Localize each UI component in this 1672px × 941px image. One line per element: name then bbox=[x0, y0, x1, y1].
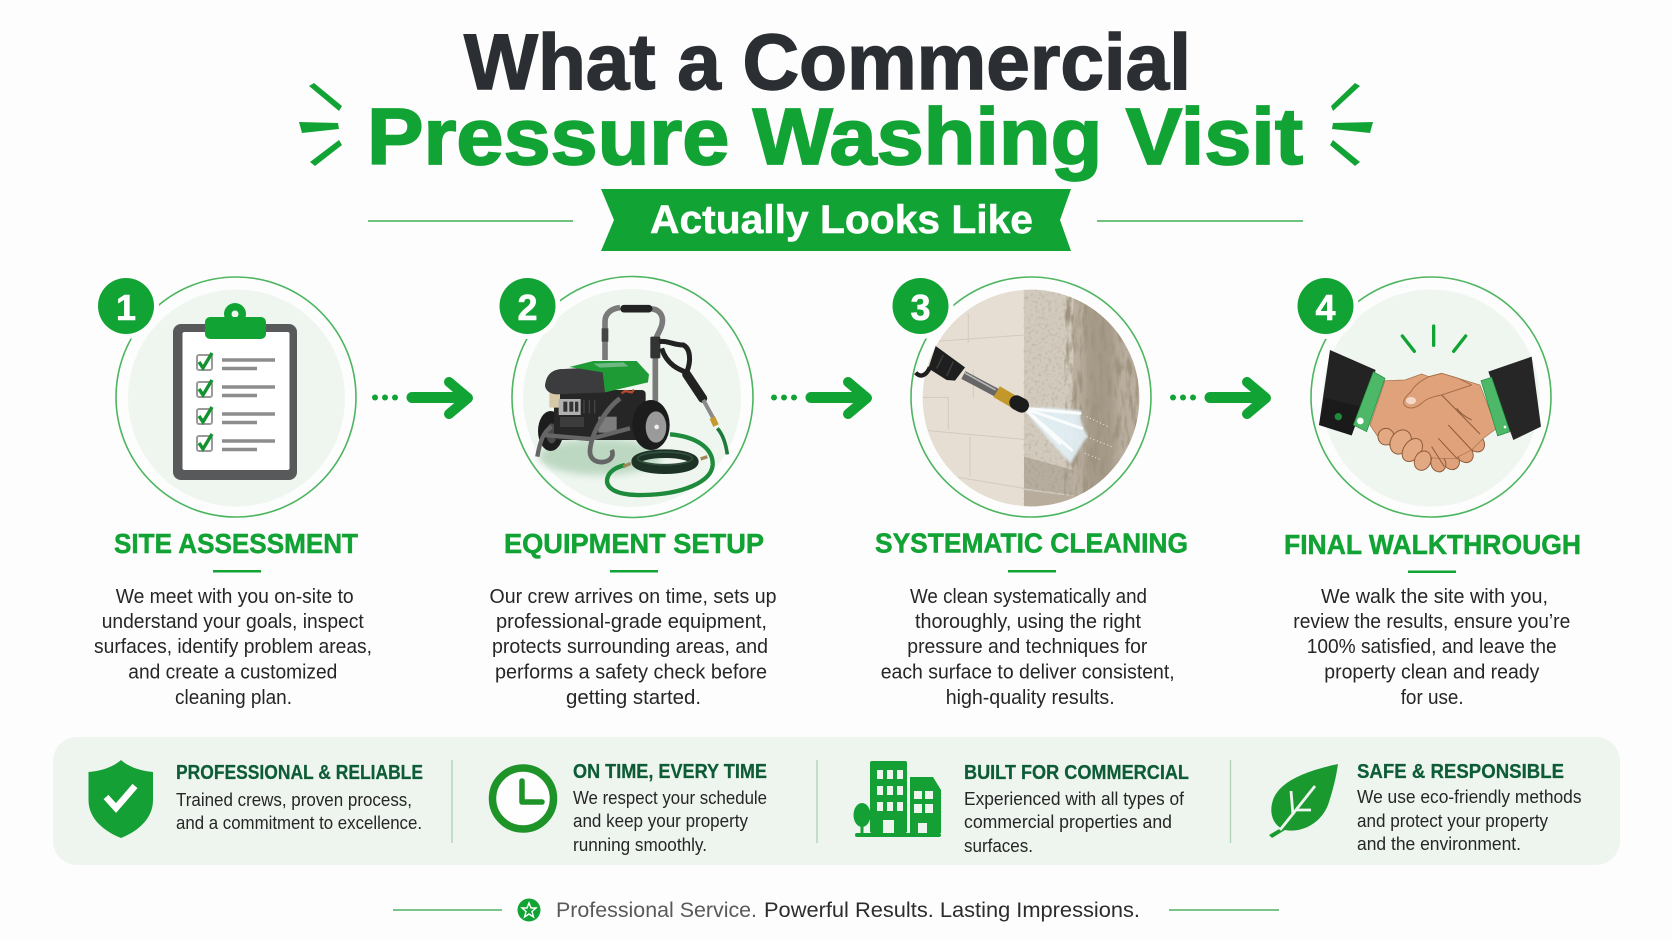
icon: pressure washer bbox=[537, 308, 727, 495]
footer tagline: Professional Service. bbox=[556, 899, 757, 922]
badge 2: 2 bbox=[517, 287, 538, 328]
text: site assessment description: cleaning plan. bbox=[175, 686, 292, 709]
benefit: safe and responsible: and protect your property bbox=[1357, 810, 1549, 831]
step 4: final walkthrough bbox=[1284, 273, 1581, 709]
icon: clipboard bbox=[173, 303, 297, 480]
benefit: safe and responsible: and the environment. bbox=[1357, 833, 1521, 854]
benefit: built for commercial: commercial properties and bbox=[964, 811, 1172, 832]
text: equipment setup description: performs a safety check before bbox=[495, 660, 767, 684]
text: systematic cleaning description: each surface to deliver consistent, bbox=[881, 660, 1175, 684]
text: final walkthrough description: review the results, ensure you’re bbox=[1293, 610, 1570, 633]
heading: site assessment: SITE ASSESSMENT bbox=[114, 528, 358, 559]
arrow 1 bbox=[372, 382, 468, 414]
icon: shield bbox=[88, 760, 153, 838]
benefit: professional and reliable: and a commitment to excellence. bbox=[176, 812, 422, 833]
badge 3 bbox=[888, 273, 954, 339]
text: site assessment description: We meet with you on-site to bbox=[116, 585, 354, 608]
benefit: built for commercial bbox=[854, 761, 1189, 856]
benefit: on time every time bbox=[492, 761, 767, 855]
text: final walkthrough description: 100% satisfied, and leave the bbox=[1307, 635, 1557, 658]
benefit: built for commercial: Experienced with all types of bbox=[964, 788, 1185, 809]
text: site assessment description: understand your goals, inspect bbox=[102, 610, 364, 633]
heading line: What a Commercial: What a Commercial bbox=[464, 17, 1191, 106]
text: systematic cleaning description: pressure and techniques for bbox=[907, 635, 1147, 658]
circle 3 bbox=[911, 277, 1151, 517]
benefit: built for commercial: surfaces. bbox=[964, 835, 1033, 856]
benefit: safe and responsible: We use eco-friendly methods bbox=[1357, 786, 1582, 807]
text: equipment setup description: protects surrounding areas, and bbox=[492, 635, 768, 658]
icon: left sparkle bbox=[299, 83, 342, 166]
text: equipment setup description: getting started. bbox=[566, 686, 701, 709]
step 3: systematic cleaning bbox=[875, 273, 1188, 709]
benefit: professional and reliable: Trained crews, proven process, bbox=[176, 789, 412, 810]
benefit: on time every time: and keep your property bbox=[573, 810, 749, 831]
text: final walkthrough description bbox=[1293, 585, 1570, 709]
text: systematic cleaning description: We clean systematically and bbox=[910, 585, 1147, 608]
badge 4: 4 bbox=[1315, 287, 1336, 328]
badge 1 bbox=[93, 273, 159, 339]
icon: clock bbox=[492, 768, 554, 829]
benefit: on time every time: ON TIME, EVERY TIME bbox=[573, 761, 767, 783]
badge 2 bbox=[494, 273, 560, 339]
step 2: equipment setup bbox=[490, 273, 776, 709]
text: equipment setup description: Our crew arrives on time, sets up bbox=[490, 585, 776, 608]
icon: handshake bbox=[1319, 326, 1541, 474]
icon: star badge bbox=[518, 898, 540, 922]
subtitle ribbon bbox=[368, 189, 1303, 251]
text: equipment setup description bbox=[490, 585, 776, 709]
text: final walkthrough description: for use. bbox=[1401, 686, 1464, 709]
icon: leaf bbox=[1269, 764, 1338, 838]
panel: benefits bbox=[53, 737, 1620, 865]
benefit: professional and reliable: PROFESSIONAL & RELIABLE bbox=[176, 762, 423, 784]
benefit: professional and reliable bbox=[88, 760, 423, 838]
benefit: safe and responsible: SAFE & RESPONSIBLE bbox=[1357, 761, 1564, 783]
circle 4 bbox=[1311, 277, 1551, 517]
icon: right sparkle bbox=[1330, 83, 1373, 166]
arrow 3 bbox=[1170, 382, 1266, 414]
heading: equipment setup: EQUIPMENT SETUP bbox=[504, 528, 764, 559]
text: site assessment description: surfaces, identify problem areas, bbox=[94, 635, 372, 658]
text: systematic cleaning description: high-quality results. bbox=[946, 686, 1115, 709]
benefit: on time every time: running smoothly. bbox=[573, 834, 707, 855]
benefit: on time every time: We respect your schedule bbox=[573, 787, 767, 808]
text: systematic cleaning description bbox=[881, 585, 1175, 709]
badge 4 bbox=[1292, 273, 1358, 339]
text: final walkthrough description: We walk the site with you, bbox=[1321, 585, 1548, 608]
badge 1: 1 bbox=[116, 287, 136, 328]
text: systematic cleaning description: thoroughly, using the right bbox=[915, 610, 1141, 633]
text: site assessment description: and create a customized bbox=[128, 660, 337, 684]
arrow 2 bbox=[771, 382, 867, 414]
benefit: built for commercial: BUILT FOR COMMERCIAL bbox=[964, 762, 1189, 784]
badge 3: 3 bbox=[910, 287, 931, 328]
step 1: site assessment bbox=[93, 273, 372, 709]
circle 1 bbox=[116, 277, 356, 517]
icon: buildings bbox=[854, 761, 941, 837]
title bbox=[367, 17, 1303, 181]
footer tagline: Powerful Results. Lasting Impressions. bbox=[764, 899, 1140, 922]
text: site assessment description bbox=[94, 585, 372, 709]
subtitle ribbon: Actually Looks Like bbox=[650, 198, 1033, 242]
text: equipment setup description: professional-grade equipment, bbox=[496, 610, 767, 633]
illustration: pressure washing a dirty wall bbox=[916, 287, 1145, 513]
heading line: Pressure Washing Visit: Pressure Washing Visit bbox=[367, 92, 1303, 181]
heading: systematic cleaning: SYSTEMATIC CLEANING bbox=[875, 528, 1188, 558]
text: final walkthrough description: property clean and ready bbox=[1324, 660, 1540, 684]
circle 2 bbox=[512, 276, 753, 518]
footer tagline bbox=[393, 898, 1279, 922]
benefit: safe and responsible bbox=[1269, 761, 1582, 854]
heading: final walkthrough: FINAL WALKTHROUGH bbox=[1284, 529, 1581, 560]
